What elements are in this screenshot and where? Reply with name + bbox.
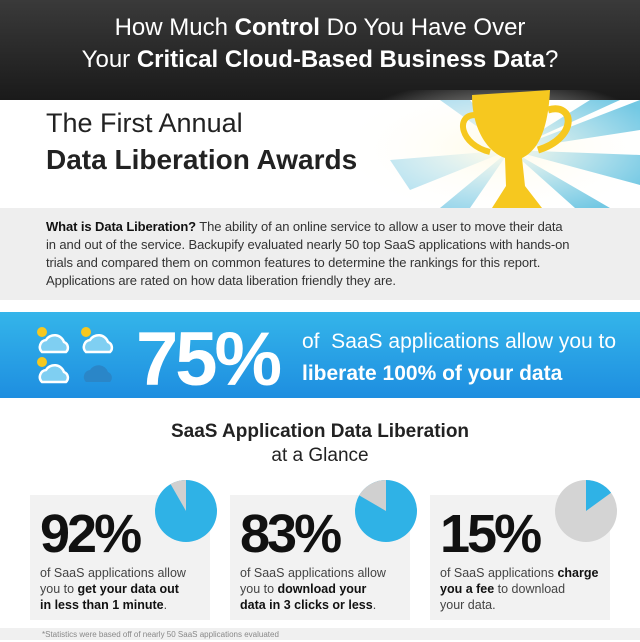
card 92%: of SaaS applications allow [40, 566, 186, 580]
card 83%: data in 3 clicks or less. [240, 598, 376, 612]
card 83%: 83% [240, 504, 339, 564]
card 92%: you to get your data out [40, 582, 179, 596]
card 92%: in less than 1 minute. [40, 598, 167, 612]
section title: at a Glance [271, 445, 369, 466]
card 15% [430, 495, 610, 620]
banner text [302, 330, 616, 385]
intro text block: Applications are rated on how data liberation friendly they are. [46, 273, 396, 288]
header bar: How Much Control Do You Have Over [115, 14, 525, 41]
icon: clouds [37, 327, 114, 384]
header bar: Your Critical Cloud-Based Business Data? [82, 46, 558, 73]
banner text: of SaaS applications allow you to [302, 330, 616, 353]
pie [155, 480, 217, 542]
card 15%: 15% [440, 504, 539, 564]
big 75%: 75% [136, 317, 279, 402]
card 15%: you a fee to download [440, 582, 565, 596]
card 92%: 92% [40, 504, 139, 564]
banner text: liberate 100% of your data [302, 362, 562, 385]
card 83% [230, 495, 410, 620]
awards title: Data Liberation Awards [46, 144, 357, 175]
intro text block: What is Data Liberation? The ability of an online service to allow a user to move their data [46, 219, 563, 234]
trophy graphic with rays [388, 90, 640, 208]
75% banner [0, 312, 640, 398]
subtitle: The First Annual [46, 108, 243, 138]
intro text block [0, 208, 640, 300]
section title: SaaS Application Data Liberation [171, 421, 469, 442]
card 15%: of SaaS applications charge [440, 566, 598, 580]
card 83%: you to download your [240, 582, 366, 596]
section title [171, 421, 469, 466]
intro text block: in and out of the service. Backupify evaluated nearly 50 top SaaS applications with hands-on [46, 237, 569, 252]
card 83%: of SaaS applications allow [240, 566, 386, 580]
card 15%: your data. [440, 598, 496, 612]
card 92% [30, 495, 210, 620]
footnote: *Statistics were based off of nearly 50 SaaS applications evaluated [42, 630, 279, 639]
header bar [0, 0, 640, 100]
intro text block: trials and compared them on common features to determine the rankings for this report. [46, 255, 540, 270]
footnote [0, 628, 640, 640]
